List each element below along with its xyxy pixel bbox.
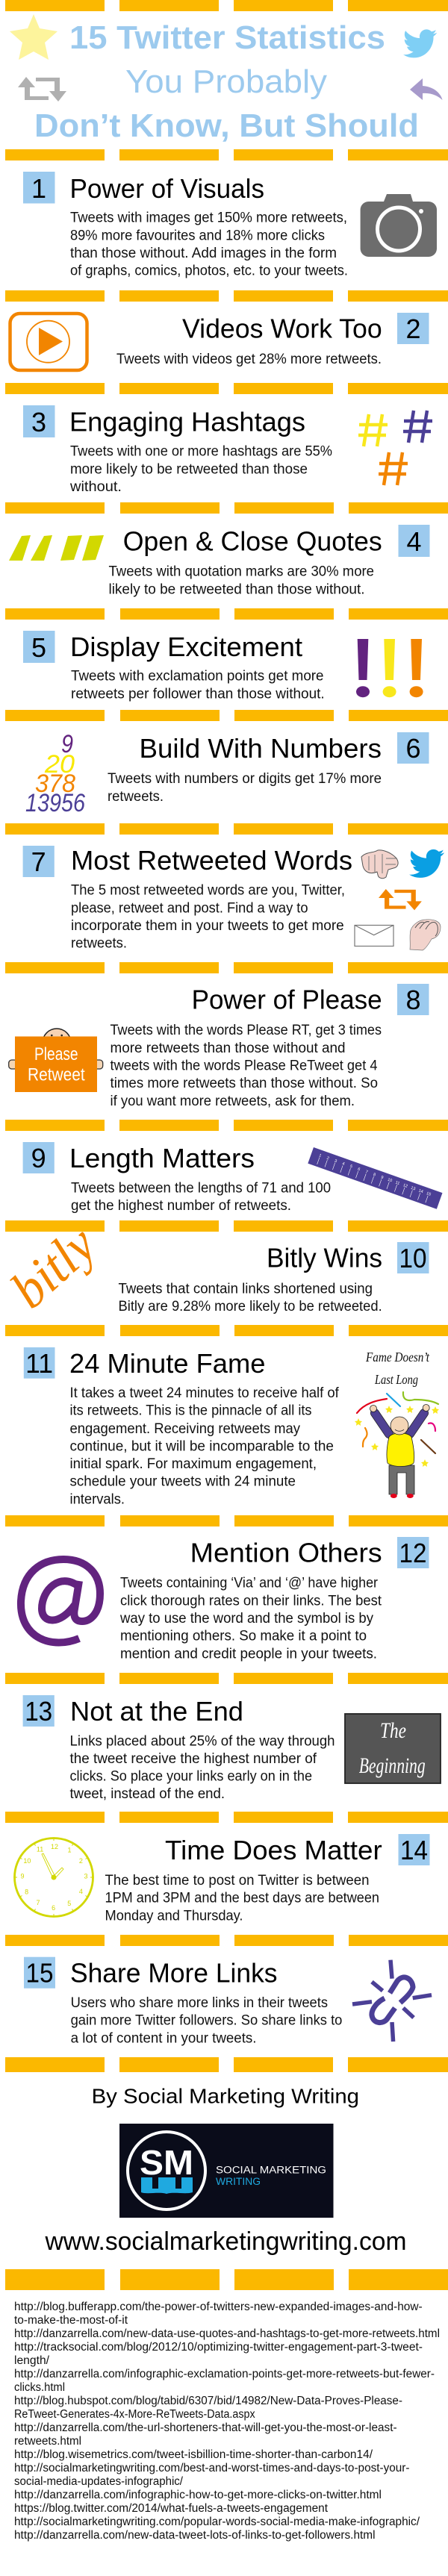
icon: the beginning chalkboard: The	[380, 1718, 406, 1743]
body text: than those without. Add images in the form	[70, 246, 337, 261]
section 8: power of please	[9, 984, 429, 1109]
icon: handwritten numbers: 13956	[25, 789, 85, 817]
icon: clock: 1	[67, 1847, 72, 1854]
website url: www.socialmarketingwriting.com	[45, 2227, 406, 2256]
body text: Links placed about 25% of the way through	[70, 1733, 335, 1749]
heading: Time Does Matter	[165, 1835, 382, 1865]
heading: Length Matters	[69, 1143, 255, 1173]
icon: reply arrow	[410, 78, 442, 100]
body text: please, retweet and post. Find a way to	[71, 900, 308, 916]
icon: video play	[10, 314, 87, 370]
body text: Users who share more links in their tweets	[71, 1995, 328, 2011]
number badge 4	[399, 525, 430, 557]
body text	[70, 210, 348, 279]
source references: http://blog.bufferapp.com/the-power-of-twitters-new-expanded-images-and-how-	[14, 2301, 423, 2313]
section 12: mention others	[21, 1537, 429, 1662]
body text: retweets.	[108, 789, 164, 805]
number badge 12: 12	[399, 1538, 427, 1568]
icon: ruler: 3	[334, 1159, 337, 1164]
icon: the beginning chalkboard	[345, 1714, 441, 1783]
heading: Power of Visuals	[70, 173, 264, 204]
body text: Tweets between the lengths of 71 and 100	[71, 1180, 331, 1196]
body text: 89% more favourites and 18% more clicks	[70, 228, 325, 243]
body text: Tweets with images get 150% more retweets,	[70, 210, 347, 225]
source references: http://danzarrella.com/infographic-how-to-get-more-clicks-on-twitter.html	[14, 2489, 382, 2501]
icon: clock: 11	[37, 1845, 43, 1853]
icon: handwritten numbers: 20	[44, 750, 75, 779]
logo: social marketing writing: SM	[140, 2143, 193, 2182]
body text: mentioning others. So make it a point to	[120, 1629, 367, 1644]
icon: retweet arrows (retweet)	[379, 889, 422, 910]
heading: Not at the End	[70, 1696, 243, 1727]
source references: http://tracksocial.com/blog/2012/10/optimizing-twitter-engagement-part-3-tweet-	[14, 2341, 423, 2354]
body text	[69, 444, 332, 495]
heading: Mention Others	[190, 1538, 382, 1568]
body text: incorporate them in your tweets to get more	[71, 918, 344, 934]
body text: continue, but it will be incomparable to the	[70, 1438, 334, 1454]
number badge 8: 8	[405, 985, 421, 1015]
body text: get the highest number of retweets.	[71, 1198, 291, 1214]
logo: social marketing writing: WRITING	[216, 2176, 261, 2187]
logo: social marketing writing: SOCIAL MARKETING	[216, 2165, 326, 2176]
body text: The 5 most retweeted words are you, Twitter,	[71, 882, 345, 898]
icon: quotation marks	[9, 535, 104, 561]
number badge 3	[23, 405, 55, 437]
source references: social-media-updates-infographic/	[14, 2475, 184, 2488]
icon: ruler: 15	[426, 1191, 432, 1197]
body text: intervals.	[70, 1491, 125, 1507]
heading: Display Excitement	[70, 631, 302, 662]
source references: clicks.html	[14, 2381, 65, 2394]
icon: fame caption	[365, 1350, 430, 1387]
source references: http://danzarrella.com/new-data-use-quotes-and-hashtags-to-get-more-retweets.html	[14, 2327, 440, 2340]
body text: gain more Twitter followers. So share links to	[71, 2013, 342, 2029]
icon: ruler: 8	[373, 1173, 376, 1178]
body text: times more retweets than those without. So	[111, 1076, 378, 1091]
body text: schedule your tweets with 24 minute	[70, 1474, 296, 1490]
body text: retweets per follower than those without.	[71, 687, 325, 702]
icon: envelope (post)	[355, 926, 393, 946]
credit line: By Social Marketing Writing	[92, 2085, 359, 2108]
icon: fame caption: Fame Doesn’t	[365, 1350, 430, 1365]
body text	[108, 771, 382, 805]
icon: handwritten numbers: 9	[61, 730, 73, 758]
icon: person holding please retweet sign: Please	[34, 1044, 78, 1064]
icon: pointing hand (you)	[361, 850, 398, 879]
icon: fame caption: Last Long	[374, 1372, 418, 1387]
icon: ruler: 6	[357, 1167, 361, 1172]
icon: clock: 9	[20, 1872, 25, 1880]
body text	[71, 1995, 342, 2046]
body text: its retweets. This is the pinnacle of all its	[70, 1403, 312, 1419]
body text: engagement. Receiving retweets may	[70, 1421, 300, 1437]
section 1: power of visuals	[23, 172, 437, 279]
heading: Bitly Wins	[267, 1243, 382, 1273]
heading: Power of Please	[192, 985, 382, 1015]
icon: star	[10, 14, 57, 60]
number badge 2: 2	[405, 314, 421, 344]
body text: likely to be retweeted than those without.	[109, 581, 364, 597]
source references	[14, 2301, 440, 2542]
body text	[71, 1180, 331, 1214]
number badge 5	[23, 631, 55, 663]
body text: Tweets with quotation marks are 30% more	[109, 564, 374, 580]
section 3: engaging hashtags	[23, 405, 432, 495]
icon: clock: 10	[23, 1857, 31, 1865]
body text: Tweets that contain links shortened using	[118, 1281, 373, 1297]
body text: tweets with the words Please ReTweet get 4	[111, 1058, 378, 1073]
number badge 2	[397, 313, 429, 344]
heading: Most Retweeted Words	[71, 845, 352, 876]
title: You Probably	[125, 63, 327, 100]
section 10: bitly wins	[0, 1214, 429, 1320]
heading: Share More Links	[70, 1958, 278, 1989]
icon: handwritten numbers: 378	[35, 770, 75, 798]
icon: retweet arrows	[18, 77, 66, 102]
icon: broken chain link	[352, 1960, 432, 2042]
body text: 1PM and 3PM and the best days are between	[105, 1891, 379, 1906]
number badge 9: 9	[31, 1143, 46, 1173]
body text: more retweets than those without and	[111, 1041, 345, 1056]
source references: https://blog.twitter.com/2014/what-fuels-a-tweets-engagement	[14, 2502, 329, 2515]
body text: tweet, instead of the end.	[70, 1786, 225, 1802]
section 11: 24 minute fame	[24, 1347, 439, 1507]
body text: Bitly are 9.28% more likely to be retweeted.	[118, 1299, 382, 1314]
icon: ruler: 1	[318, 1153, 322, 1158]
number badge 11: 11	[25, 1348, 53, 1379]
source references: http://danzarrella.com/infographic-exclamation-points-get-more-retweets-but-fewer-	[14, 2368, 435, 2380]
source references: http://danzarrella.com/new-data-tweet-lots-of-links-to-get-followers.html	[14, 2529, 375, 2542]
body text	[71, 669, 325, 702]
source references: http://socialmarketingwriting.com/best-and-worst-times-and-days-to-post-your-	[14, 2462, 409, 2474]
body text: way to use the word and the symbol is by	[119, 1611, 373, 1627]
icon: praying hand (please)	[410, 920, 441, 950]
icon: clock: 7	[36, 1899, 40, 1906]
source references: ReTweet-Generates-4x-More-ReTweets-Data.aspx	[14, 2408, 255, 2421]
icon: ruler: 11	[395, 1180, 400, 1186]
number badge 13: 13	[25, 1696, 52, 1727]
icon: twitter bird	[403, 29, 437, 57]
heading: Videos Work Too	[182, 314, 382, 344]
icon: ruler: 12	[402, 1183, 408, 1189]
body text: of graphs, comics, photos, etc. to your tweets.	[70, 263, 348, 279]
logo: social marketing writing	[119, 2124, 333, 2218]
number badge 7	[23, 846, 55, 877]
body text: Tweets containing ‘Via’ and ‘@’ have higher	[120, 1576, 379, 1591]
body text: initial spark. For maximum engagement,	[70, 1456, 317, 1472]
body text: clicks. So place your links early on in the	[70, 1769, 312, 1785]
icon: clock: 8	[25, 1889, 28, 1896]
icon: person holding please retweet sign	[9, 1029, 103, 1092]
icon: twitter bird (twitter)	[409, 849, 444, 878]
body text	[105, 1873, 379, 1924]
icon: clock	[14, 1838, 93, 1917]
body text	[119, 1576, 382, 1662]
body text: click thorough rates on their links. The best	[120, 1593, 382, 1609]
section 2: videos work too	[10, 313, 429, 370]
number badge 14: 14	[400, 1835, 428, 1865]
icon: ruler: 9	[380, 1176, 384, 1180]
icon: hashtags	[358, 411, 432, 485]
icon: handwritten numbers	[25, 730, 85, 817]
number badge 3: 3	[31, 407, 46, 437]
heading: 24 Minute Fame	[69, 1348, 265, 1379]
number badge 7: 7	[31, 846, 46, 877]
section 9: length matters	[23, 1142, 443, 1214]
number badge 10: 10	[399, 1243, 427, 1273]
icon: camera	[361, 194, 437, 257]
heading: Engaging Hashtags	[69, 407, 305, 437]
body text: Tweets with one or more hashtags are 55%	[70, 444, 332, 460]
source references: http://blog.hubspot.com/blog/tabid/6307/bid/14982/New-Data-Proves-Please-	[14, 2395, 402, 2407]
body text	[118, 1281, 382, 1314]
number badge 5: 5	[31, 632, 46, 663]
icon: person holding please retweet sign: Retweet	[28, 1065, 85, 1085]
source references: http://blog.wisemetrics.com/tweet-isbillion-time-shorter-than-carbon14/	[14, 2448, 373, 2461]
icon: ruler: 7	[364, 1170, 368, 1175]
icon: exclamation marks	[356, 639, 423, 697]
icon: clock: 12	[51, 1843, 58, 1850]
icon: ruler	[308, 1147, 443, 1209]
number badge 1	[23, 172, 55, 204]
number badge 4: 4	[406, 526, 422, 557]
icon: celebrating person with confetti	[355, 1392, 439, 1498]
body text: retweets.	[71, 936, 127, 952]
body text: Tweets with exclamation points get more	[71, 669, 324, 684]
icon: ruler: 5	[349, 1164, 353, 1170]
section 6: build with numbers	[25, 730, 429, 817]
title	[34, 19, 419, 144]
body text: Tweets with videos get 28% more retweets.	[116, 352, 382, 367]
number badge 15: 15	[25, 1958, 54, 1989]
icon: ruler: 13	[410, 1186, 416, 1191]
body text: the tweet receive the highest number of	[70, 1751, 317, 1767]
icon: ruler: 10	[387, 1178, 393, 1183]
source references: retweets.html	[14, 2435, 81, 2448]
icon: clock: 4	[79, 1888, 83, 1895]
section 7: most retweeted words	[23, 845, 444, 952]
body text: if you want more retweets, ask for them.	[111, 1094, 355, 1109]
icon: ruler: 14	[418, 1188, 423, 1194]
number badge 6	[397, 732, 429, 764]
title: Don’t Know, But Should	[34, 107, 419, 144]
body text: Tweets with the words Please RT, get 3 times	[111, 1023, 382, 1038]
icon: ruler: 2	[326, 1156, 329, 1161]
body text	[111, 1023, 382, 1109]
body text	[70, 1385, 339, 1507]
section 15: share more links	[24, 1957, 432, 2046]
number badge 6: 6	[405, 733, 421, 764]
body text: mention and credit people in your tweets.	[120, 1647, 377, 1662]
icon: bitly script logo: bitly	[0, 1214, 107, 1320]
body text: a lot of content in your tweets.	[71, 2030, 256, 2046]
body text	[70, 1733, 335, 1802]
source references: length/	[14, 2354, 50, 2367]
body text: without.	[69, 479, 122, 495]
source references: http://danzarrella.com/the-url-shorteners-that-will-get-you-the-most-or-least-	[14, 2421, 397, 2434]
icon: at symbol	[21, 1559, 100, 1643]
section 5: display excitement	[23, 631, 423, 702]
section 13: not at the end	[23, 1695, 441, 1802]
body text: The best time to post on Twitter is between	[105, 1873, 369, 1889]
icon: clock: 3	[84, 1872, 88, 1880]
heading: Build With Numbers	[139, 733, 382, 764]
icon: ruler: 4	[341, 1161, 345, 1167]
body text: Monday and Thursday.	[105, 1908, 243, 1924]
body text	[109, 564, 374, 597]
title: 15 Twitter Statistics	[69, 19, 385, 56]
section 4: open and close quotes	[9, 525, 430, 597]
number badge 1: 1	[31, 173, 46, 204]
number badge 8	[397, 984, 429, 1015]
body text: more likely to be retweeted than those	[70, 461, 308, 477]
number badge 9	[23, 1142, 55, 1173]
icon: clock: 6	[52, 1904, 55, 1912]
body text: Tweets with numbers or digits get 17% more	[108, 771, 382, 787]
icon: clock: 5	[67, 1900, 71, 1907]
body text: It takes a tweet 24 minutes to receive half of	[70, 1385, 339, 1401]
section 14: time does matter	[14, 1834, 430, 1924]
source references: http://socialmarketingwriting.com/popular-words-social-media-make-infographic/	[14, 2516, 420, 2528]
source references: to-make-the-most-of-it	[14, 2314, 128, 2327]
heading: Open & Close Quotes	[123, 526, 382, 557]
icon: clock: 2	[79, 1857, 83, 1865]
body text	[71, 882, 345, 952]
